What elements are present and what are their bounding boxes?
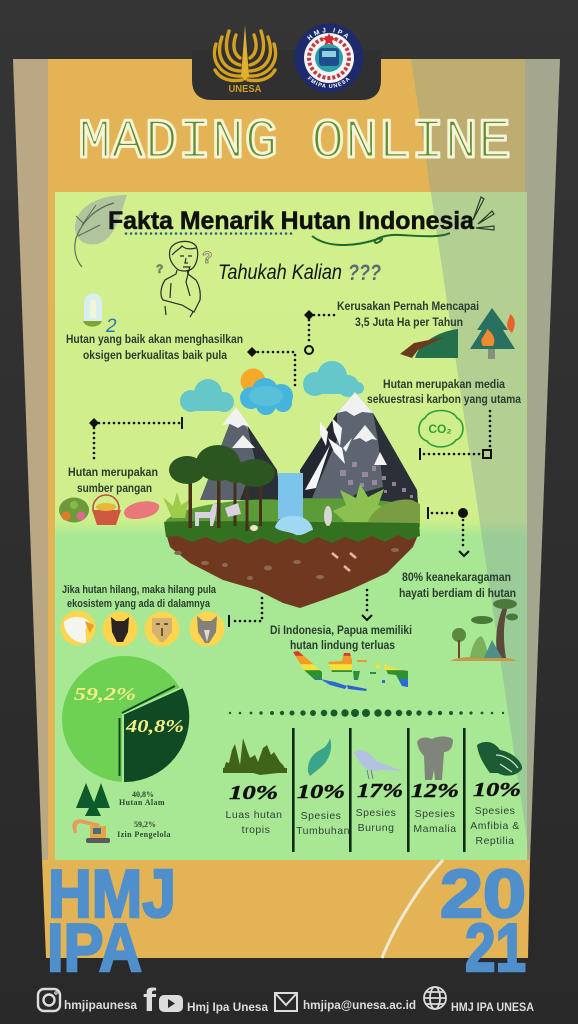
soil <box>165 530 420 608</box>
text: food source <box>68 467 158 495</box>
icon: instagram <box>38 989 60 1011</box>
stat: birds 17%: 17% <box>357 780 403 802</box>
icon: youtube <box>159 995 183 1012</box>
stat: amphibians 10%: Reptilia <box>475 835 515 847</box>
spotlight beam <box>411 59 560 860</box>
icon: thinking person: ? <box>202 248 212 267</box>
icon: UNESA logo: UNESA <box>228 83 262 95</box>
connector: biodiversity <box>427 507 469 556</box>
stat: amphibians 10% <box>470 742 522 847</box>
stat: amphibians 10%: Amfibia & <box>470 820 520 832</box>
text: food source: sumber pangan <box>77 483 152 495</box>
icon: HMJ IPA logo: FMIPA UNESA <box>308 76 350 88</box>
icon: mail <box>275 993 297 1011</box>
text: papua: hutan lindung terluas <box>290 640 395 652</box>
icon: rainbow Indonesia map <box>293 651 408 691</box>
text: ecosystem: ekosistem yang ada di dalamnya <box>67 598 211 610</box>
icon: thinking person <box>156 241 212 317</box>
connector: food <box>89 417 183 460</box>
stat: amphibians 10%: Spesies <box>475 805 515 817</box>
chart: pie: 59,2% <box>74 684 136 704</box>
stat: plants 10% <box>296 738 350 837</box>
column dividers <box>292 728 466 852</box>
text: oxygen: oksigen berkualitas baik pula <box>83 350 228 362</box>
stat: birds 17%: Spesies <box>356 807 396 819</box>
chart: pie <box>62 656 190 783</box>
icon: leaf <box>75 195 127 267</box>
legend: Izin Pengelola <box>117 820 171 839</box>
text: HMJ IPA: HMJ <box>48 856 176 932</box>
trees <box>169 445 275 531</box>
text: damage <box>337 301 479 329</box>
text: 2021: 20 <box>440 856 526 932</box>
stat: forest 10%: 10% <box>229 782 278 804</box>
text: HMJ IPA <box>47 856 176 986</box>
icon: oxygen bottle <box>83 293 117 337</box>
stat: amphibians 10%: 10% <box>473 779 521 801</box>
icon: globe <box>424 987 446 1009</box>
text: damage: 3,5 Juta Ha per Tahun <box>355 317 463 329</box>
illustration: floating island <box>163 361 420 608</box>
stat: forest 10%: Luas hutan <box>226 809 282 821</box>
stat: plants 10%: Tumbuhan <box>296 825 350 837</box>
heading underline dots <box>126 232 293 235</box>
connector: damage <box>304 310 338 354</box>
connector: carbon <box>419 411 491 460</box>
legend: Izin Pengelola: Izin Pengelola <box>117 830 171 839</box>
text: ecosystem: Jika hutan hilang, maka hilang pula <box>62 584 217 596</box>
connector: papua <box>362 590 372 620</box>
text: oxygen: Hutan yang baik akan menghasilkan <box>66 334 243 346</box>
text: carbon: sekuestrasi karbon yang utama <box>367 394 522 406</box>
icon: facebook: f <box>143 982 156 1018</box>
text: damage: Kerusakan Pernah Mencapai <box>337 301 479 313</box>
connector: oxygen <box>247 347 295 390</box>
text: HMJ IPA: IPA <box>47 910 142 986</box>
icon: HMJ IPA logo: HMJ IPA <box>307 28 348 40</box>
text: website: HMJ IPA UNESA <box>451 1002 534 1014</box>
icon: CO2 cloud <box>419 410 463 447</box>
icon: felled tree <box>400 329 458 358</box>
text: youtube channel: Hmj Ipa Unesa <box>187 1002 269 1014</box>
stat: plants 10%: 10% <box>297 781 345 803</box>
legend: Izin Pengelola: 59,2% <box>134 820 156 829</box>
text: carbon: Hutan merupakan media <box>383 379 506 391</box>
animals <box>195 503 332 531</box>
icon: sparks <box>473 197 494 230</box>
text: 2021: 21 <box>465 910 526 986</box>
stat: forest 10% <box>223 738 287 836</box>
legend: Hutan Alam: 40,8% <box>132 790 154 799</box>
waterfall <box>275 473 313 535</box>
icon: oxygen bottle: 2 <box>105 316 117 337</box>
text: email: hmjipa@unesa.ac.id <box>303 1000 416 1012</box>
icon: thinking person: ? <box>156 262 163 276</box>
icon: boar <box>102 612 138 646</box>
sub heading: Tahukah Kalian: Tahukah Kalian <box>218 261 342 284</box>
legend: Hutan Alam: Hutan Alam <box>119 798 165 807</box>
dotted divider <box>229 709 504 717</box>
icon: vegetables <box>59 498 89 522</box>
stat: mammals 12% <box>411 736 459 835</box>
stat: birds 17% <box>353 750 403 834</box>
bushes <box>163 484 420 523</box>
text: papua: Di Indonesia, Papua memiliki <box>270 625 412 637</box>
heading: Fakta Menarik Hutan Indonesia <box>108 207 475 235</box>
text: food source: Hutan merupakan <box>68 467 158 479</box>
soil stones <box>174 548 399 580</box>
text: carbon <box>367 379 522 406</box>
text: ecosystem <box>62 584 217 610</box>
icon: biodiversity landscape <box>451 599 518 661</box>
text: papua <box>270 625 412 652</box>
icon: leopard <box>144 612 180 646</box>
stat: mammals 12%: Mamalia <box>413 823 457 835</box>
text: 2021 <box>440 856 526 986</box>
connector: ecosystem <box>228 598 262 627</box>
icon: pine trees <box>76 783 110 816</box>
legend: Hutan Alam <box>119 790 165 807</box>
text: biodiversity: hayati berdiam di hutan <box>399 588 516 600</box>
icon: CO2 cloud: CO₂ <box>428 422 452 436</box>
logo notch <box>192 50 381 100</box>
stat: plants 10%: Spesies <box>301 810 341 822</box>
heading squiggle <box>312 233 450 245</box>
worms <box>332 553 356 571</box>
mountains <box>200 392 418 505</box>
decorative curve <box>382 860 443 958</box>
stat: mammals 12%: Spesies <box>415 808 455 820</box>
grass <box>164 498 420 544</box>
icon: wolf <box>190 612 224 646</box>
icon: burning tree <box>470 308 515 359</box>
icon: eagle <box>60 610 96 646</box>
chart: pie: 40,8% <box>125 716 184 736</box>
title: Mading Online: MADING ONLINE <box>78 110 511 174</box>
text: oxygen <box>66 334 243 362</box>
icon: meat <box>124 501 159 519</box>
icon: HMJ IPA logo <box>294 24 364 92</box>
stat: birds 17%: Burung <box>358 822 394 834</box>
sub heading: Tahukah Kalian: ??? <box>348 260 381 285</box>
icon: UNESA logo <box>214 25 276 95</box>
stat: mammals 12%: 12% <box>411 780 459 802</box>
panel: green content area <box>55 192 527 860</box>
text: instagram handle: hmjipaunesa <box>64 1000 138 1012</box>
clouds <box>180 361 364 415</box>
icon: basket <box>92 495 121 525</box>
stat: forest 10%: tropis <box>242 824 270 836</box>
icon: excavator <box>72 819 110 843</box>
text: biodiversity: 80% keanekaragaman <box>402 572 511 584</box>
text: biodiversity <box>399 572 516 600</box>
